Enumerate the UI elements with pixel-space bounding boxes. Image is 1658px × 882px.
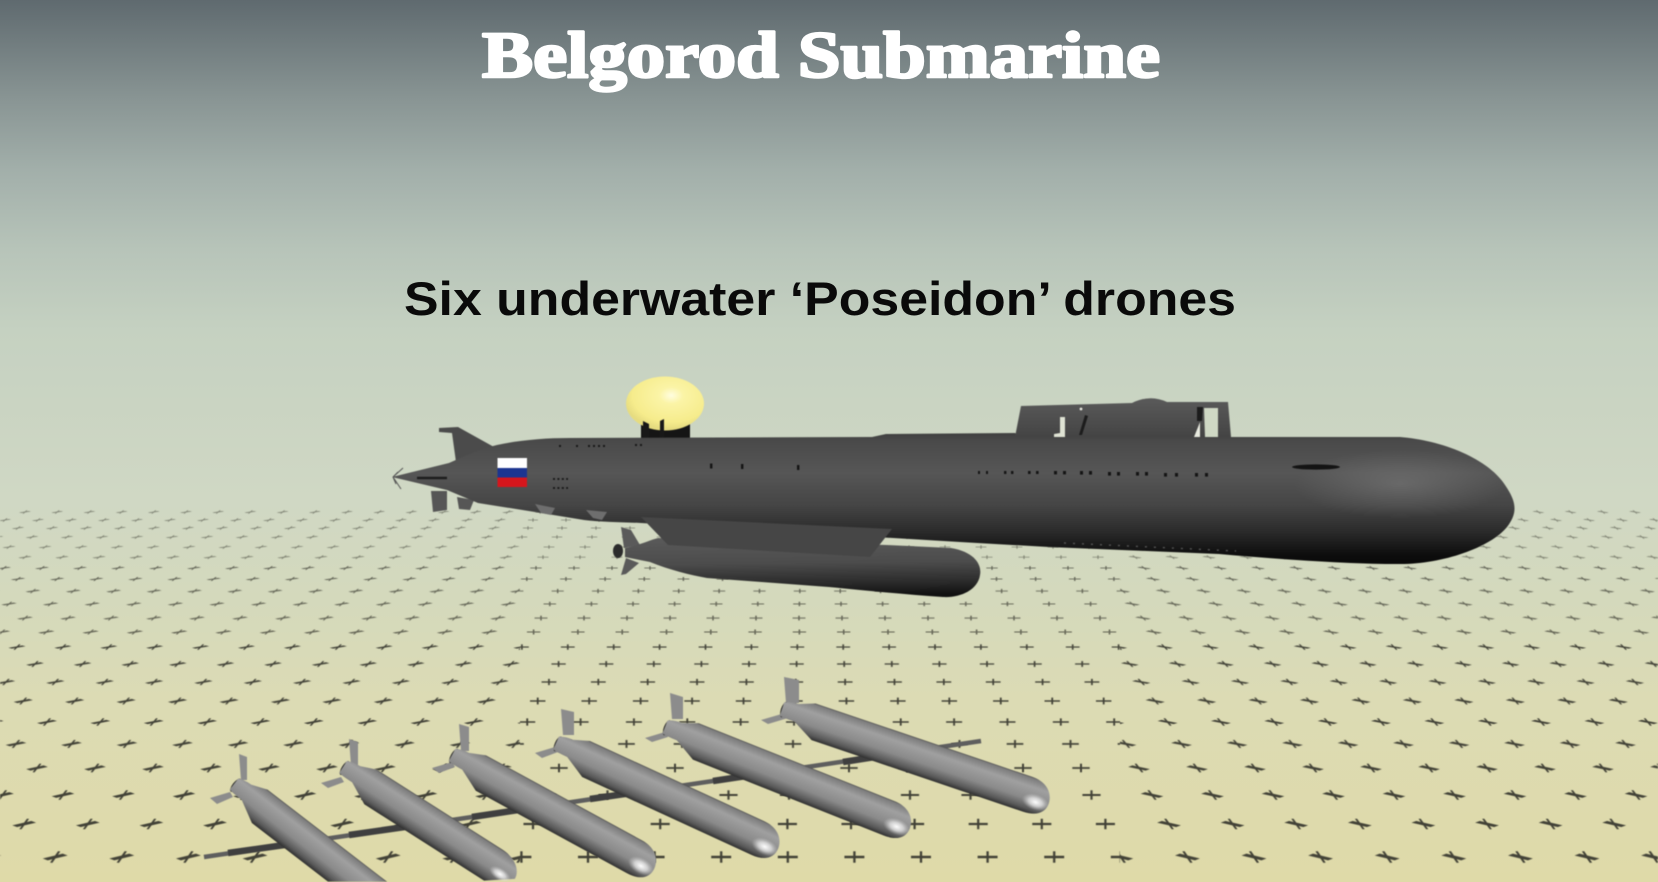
subtitle: Six underwater ‘Poseidon’ drones	[404, 272, 1236, 325]
Belgorod submarine	[392, 376, 1515, 597]
drone 6	[761, 677, 1056, 819]
bow highlight	[1295, 450, 1505, 518]
drone 1	[210, 754, 387, 882]
submarine hull	[392, 433, 1515, 564]
drone 4	[535, 709, 787, 864]
drone 5	[645, 693, 918, 844]
conning tower sail	[1015, 398, 1231, 437]
six Poseidon drones with launch rail	[204, 677, 1056, 882]
under-hull fins	[535, 504, 607, 520]
Russian flag	[498, 458, 527, 487]
icon: yellow rescue buoy on its stand	[626, 376, 704, 438]
drone 2	[321, 739, 524, 882]
launch rail	[204, 741, 981, 857]
drone 3	[432, 724, 664, 882]
ground grid of perspective plus marks	[0, 509, 1658, 867]
belly hump	[641, 517, 892, 557]
hull ports and details	[417, 445, 1340, 551]
drone carrier mini submersible	[613, 527, 980, 597]
tail fins and propeller	[393, 427, 494, 512]
title: Belgorod Submarine	[482, 19, 1160, 92]
